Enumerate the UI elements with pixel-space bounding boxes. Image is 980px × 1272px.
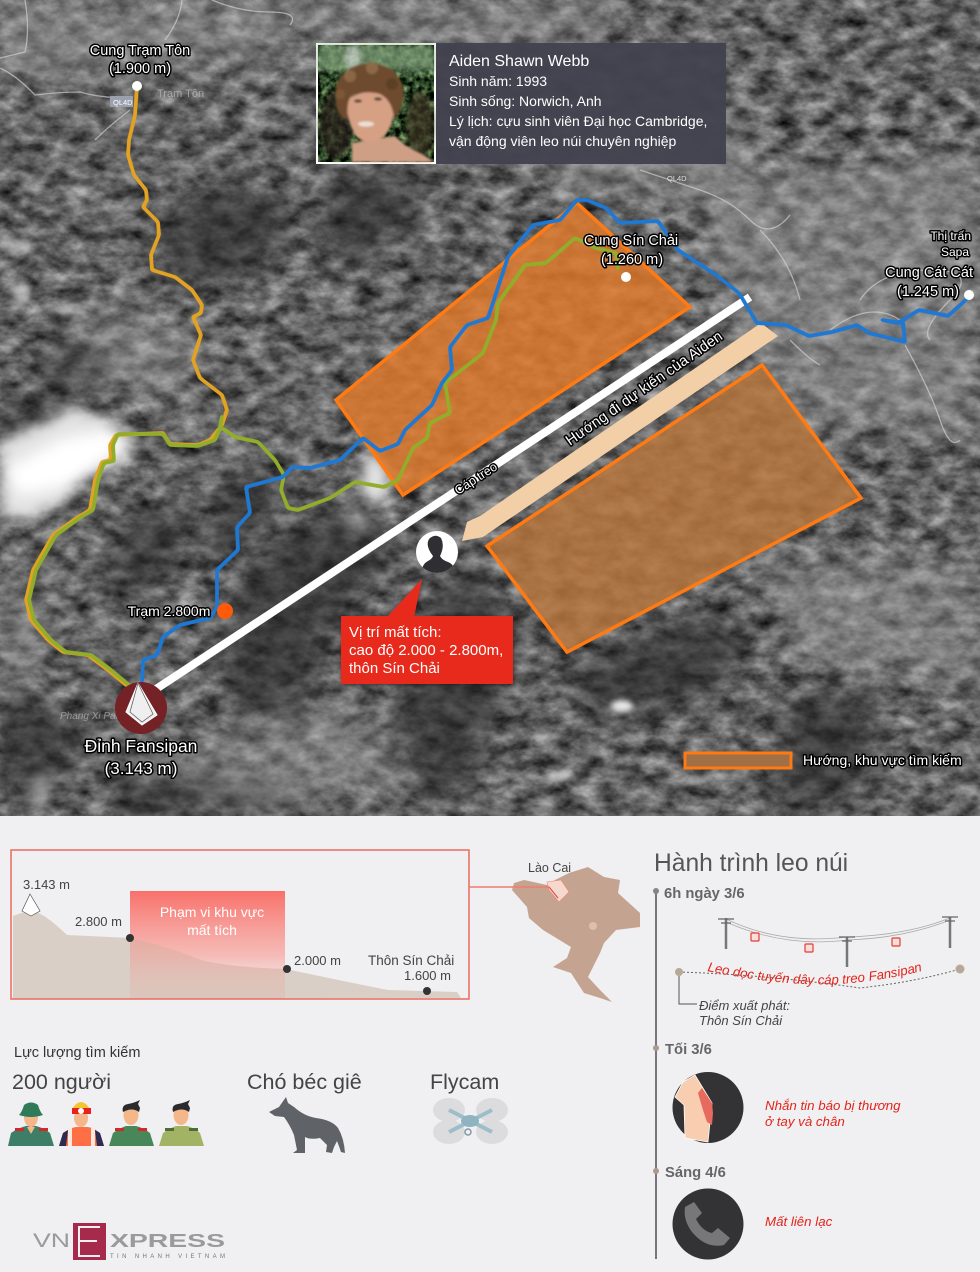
locator map: northern Vietnam: Lào Cai bbox=[528, 861, 571, 875]
elevation profile chart: 1.600 m bbox=[404, 968, 451, 983]
VnExpress logo: TIN NHANH VIETNAM bbox=[110, 1254, 225, 1260]
label: 200 people: 200 người bbox=[12, 1070, 111, 1094]
legend: search area bbox=[685, 752, 962, 768]
map labels: (1.245 m) bbox=[897, 284, 959, 300]
elevation profile chart: 2.800 m bbox=[75, 914, 122, 929]
map labels: Cáp treo bbox=[452, 460, 500, 498]
timeline dates: Sáng 4/6 bbox=[665, 1165, 726, 1181]
map labels bbox=[85, 43, 973, 778]
satellite map background: Phang Xi Pang bbox=[60, 711, 127, 722]
elevation profile chart: Phạm vi khu vực bbox=[160, 904, 264, 920]
point: Cat Cat bbox=[964, 290, 974, 300]
event text: injury message bbox=[765, 1098, 901, 1129]
timeline heading: Hành trình leo núi bbox=[654, 850, 848, 877]
timeline axis bbox=[653, 888, 659, 1259]
satellite map background: Trạm Tôn bbox=[157, 88, 204, 100]
timeline dates: Tối 3/6 bbox=[665, 1042, 712, 1058]
map labels: Trạm 2.800m bbox=[128, 603, 210, 619]
lower panel background bbox=[0, 816, 980, 1272]
expected route arrow bbox=[462, 323, 778, 541]
callout: missing location bbox=[341, 579, 513, 684]
callout: missing location: thôn Sín Chải bbox=[349, 660, 440, 677]
event text: lost contact: Mất liên lạc bbox=[765, 1214, 833, 1229]
route: orange trail from Tram Ton bbox=[26, 86, 227, 689]
VnExpress logo: XPRESS bbox=[110, 1230, 225, 1251]
icon: border guard bbox=[8, 1102, 54, 1146]
elevation profile chart bbox=[11, 850, 469, 999]
map labels: Thị trấn bbox=[930, 229, 971, 243]
search forces heading: Lực lượng tìm kiếm bbox=[14, 1045, 140, 1061]
satellite map background: QL4D bbox=[667, 174, 687, 183]
map labels: (1.260 m) bbox=[601, 252, 663, 268]
profile card: vận động viên leo núi chuyên nghiệp bbox=[449, 133, 677, 149]
point: Tram Ton bbox=[132, 81, 142, 91]
search area: lower zone bbox=[487, 365, 861, 652]
map labels: Cung Trạm Tôn bbox=[90, 43, 190, 59]
label: dog: Chó béc giê bbox=[247, 1070, 362, 1094]
route: green trail from Sin Chai bbox=[29, 238, 618, 690]
dotted climb route bbox=[675, 964, 964, 988]
satellite map background bbox=[0, 0, 980, 816]
profile card: Sinh năm: 1993 bbox=[449, 73, 547, 89]
map labels: Đỉnh Fansipan bbox=[85, 736, 197, 756]
profile card bbox=[316, 43, 726, 164]
icon: rescuer bbox=[59, 1102, 104, 1146]
peak icon bbox=[22, 894, 40, 916]
VnExpress logo: VN bbox=[33, 1231, 70, 1252]
event text: injury message: Nhắn tin báo bị thương bbox=[765, 1098, 901, 1113]
elevation profile chart: 2.000 m bbox=[294, 953, 341, 968]
icon: police officer bbox=[109, 1100, 154, 1146]
cable car line bbox=[150, 297, 750, 693]
callout: missing location: Vị trí mất tích: bbox=[349, 624, 442, 641]
search area: upper zone bbox=[336, 203, 690, 495]
map labels: Hướng đi dự kiến của Aiden bbox=[563, 328, 726, 449]
VnExpress logo bbox=[33, 1223, 225, 1260]
map labels: Cung Cát Cát bbox=[885, 265, 973, 281]
timeline dates: 6h ngày 3/6 bbox=[664, 886, 745, 902]
missing person icon bbox=[416, 531, 458, 573]
route: blue trail from Cat Cat bbox=[142, 200, 969, 683]
clouds bbox=[0, 408, 390, 815]
event text: injury message: ở tay và chân bbox=[765, 1114, 845, 1129]
map labels: Cung Sín Chải bbox=[584, 233, 678, 249]
map labels: (1.900 m) bbox=[109, 61, 171, 77]
callout: missing location: cao độ 2.000 - 2.800m, bbox=[349, 642, 503, 659]
satellite map background: QL4D bbox=[113, 98, 133, 107]
map labels: (3.143 m) bbox=[105, 759, 177, 778]
elevation profile chart: 3.143 m bbox=[23, 877, 70, 892]
elevation profile chart: Thôn Sín Chải bbox=[368, 953, 454, 968]
station marker bbox=[217, 603, 233, 619]
timeline dates bbox=[664, 886, 745, 1181]
label: flycam: Flycam bbox=[430, 1070, 499, 1094]
roads bbox=[0, 0, 961, 442]
icon: phone bbox=[672, 1188, 744, 1260]
illustration: cable car bbox=[718, 917, 958, 967]
portrait photo bbox=[316, 43, 436, 164]
profile card: Aiden Shawn Webb bbox=[449, 53, 589, 70]
icon: drone bbox=[433, 1098, 508, 1144]
profile card: Sinh sống: Norwich, Anh bbox=[449, 93, 602, 109]
summit marker bbox=[115, 682, 167, 734]
start point leader bbox=[679, 976, 697, 1004]
icon: injured leg bbox=[672, 1072, 744, 1143]
start point label: Điểm xuất phát: bbox=[699, 998, 790, 1013]
profile card: Lý lịch: cựu sinh viên Đại học Cambridge, bbox=[449, 113, 707, 129]
route caption: Leo dọc tuyến dây cáp treo Fansipan bbox=[708, 962, 921, 987]
point: Sin Chai bbox=[621, 272, 631, 282]
bio panel bbox=[436, 43, 726, 164]
start point label: Thôn Sín Chải bbox=[699, 1013, 783, 1028]
legend: search area: Hướng, khu vực tìm kiếm bbox=[803, 752, 962, 768]
locator map: northern Vietnam bbox=[469, 861, 640, 1002]
elevation profile chart: mất tích bbox=[187, 922, 237, 938]
icon: local militia bbox=[159, 1100, 204, 1146]
icon: German shepherd bbox=[269, 1097, 345, 1153]
start point label bbox=[699, 998, 790, 1028]
map labels: Sapa bbox=[941, 245, 969, 259]
